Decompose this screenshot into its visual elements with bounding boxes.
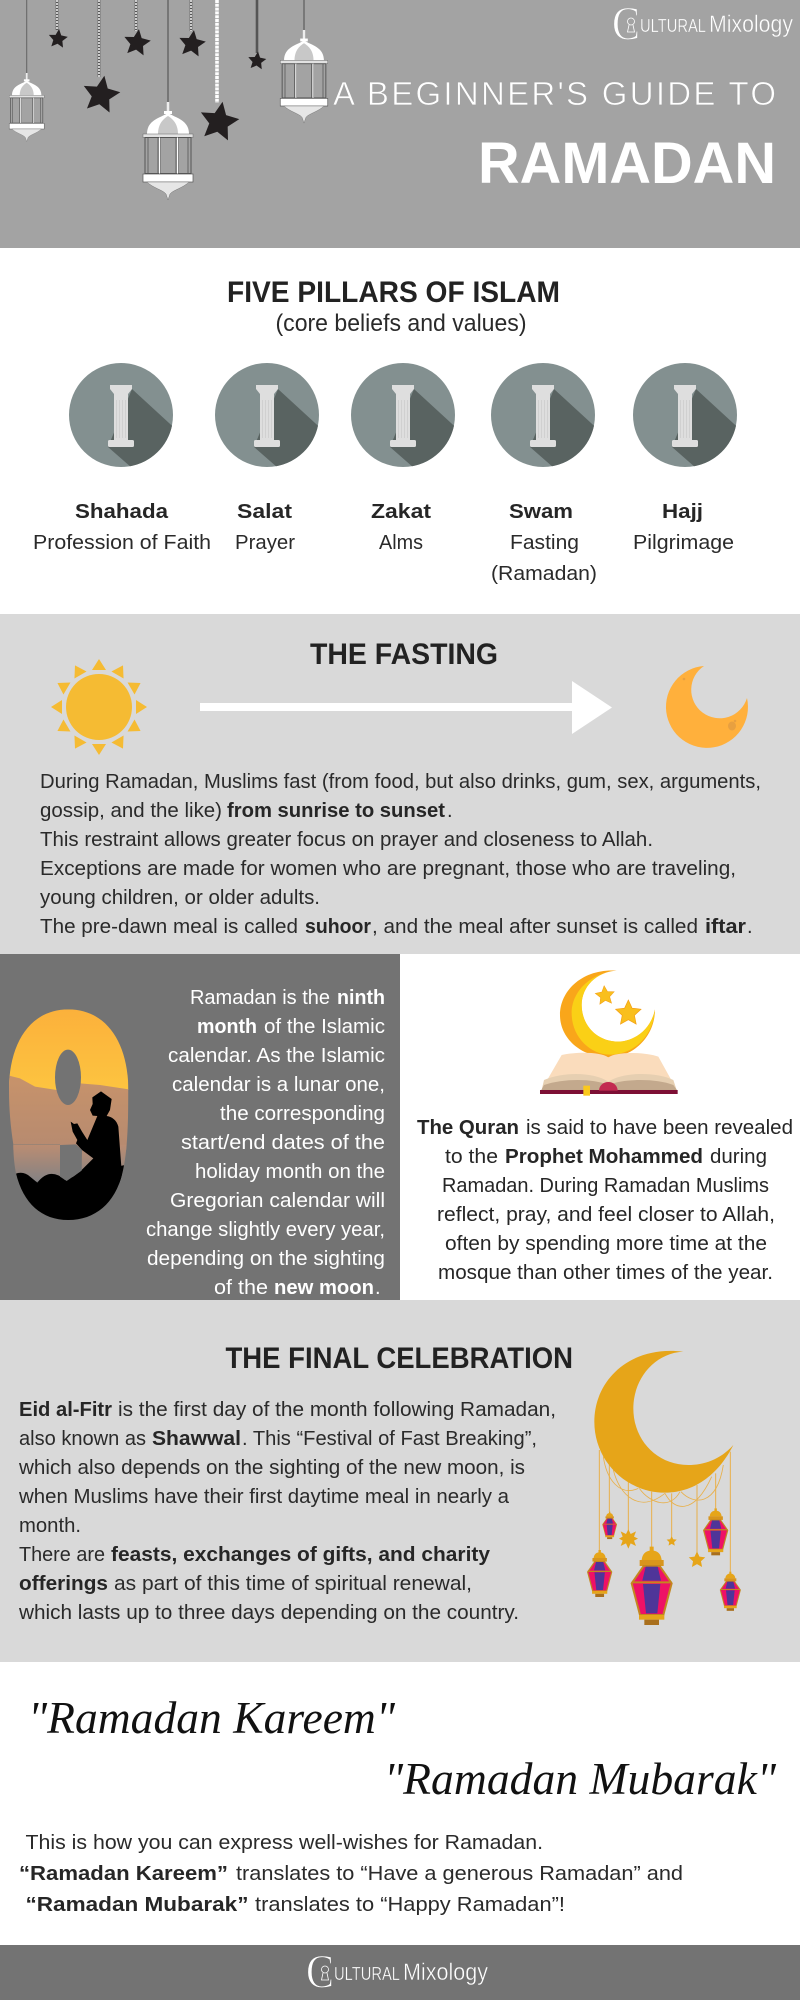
text: Eid al-Fitr description: when Muslims have their first daytime meal in nearly a <box>18 1485 510 1508</box>
text: fasting description: . <box>747 916 753 938</box>
text: ninth month description: Ramadan is the <box>190 987 330 1009</box>
text: ninth month description <box>146 987 385 1299</box>
text: ninth month description: holiday month on the <box>195 1161 385 1183</box>
text: Quran description: to the <box>445 1146 498 1168</box>
heading: the fasting: THE FASTING <box>310 638 498 671</box>
text: ninth month description: the corresponding <box>220 1103 385 1125</box>
label: Swam: (Ramadan) <box>491 562 597 585</box>
logo: Cultural Mixology footer <box>306 1946 488 1998</box>
label: Shahada: Profession of Faith <box>33 531 211 554</box>
panel: the final celebration <box>0 1300 800 1662</box>
text: fasting description: During Ramadan, Muslims fast (from food, but also drinks, gum, sex, arguments, <box>40 770 761 793</box>
label: Swam <box>491 501 597 585</box>
logo: Cultural Mixology <box>612 0 793 50</box>
text: Quran description: often by spending more time at the <box>445 1233 767 1255</box>
hanging lanterns and stars <box>9 0 328 200</box>
panel: header <box>0 0 800 248</box>
text: fasting description: gossip, and the like) <box>40 799 222 822</box>
title line: A Beginner's Guide to: A BEGINNER'S GUIDE TO <box>333 75 776 112</box>
label: Hajj <box>633 501 734 554</box>
text: Eid al-Fitr description: also known as <box>19 1427 146 1450</box>
heading: five pillars: FIVE PILLARS OF ISLAM <box>227 276 560 309</box>
text: Eid al-Fitr description: which lasts up to three days depending on the country. <box>18 1601 519 1624</box>
panel: ninth month <box>0 954 400 1300</box>
greeting: Ramadan Kareem: "Ramadan Kareem" <box>28 1693 396 1743</box>
text: Eid al-Fitr description: Eid al-Fitr <box>19 1399 112 1421</box>
text: ninth month description: Gregorian calendar will <box>170 1190 385 1212</box>
logo: Cultural Mixology footer: ULTURAL <box>334 1964 400 1984</box>
text: Quran description: mosque than other times of the year. <box>438 1262 773 1284</box>
label: Zakat: Zakat <box>371 501 431 523</box>
label: Hajj: Pilgrimage <box>633 531 734 554</box>
label: Zakat <box>371 501 431 554</box>
icon: pillar 5 <box>633 363 737 467</box>
greeting: Ramadan Mubarak: "Ramadan Mubarak" <box>384 1754 777 1804</box>
text: fasting description: from sunrise to sunset <box>227 800 445 822</box>
icon: pillar 1 <box>69 363 173 467</box>
panel: greetings <box>0 1662 800 1945</box>
text: ninth month description: start/end dates of the <box>181 1132 385 1154</box>
illustration: crescent with hanging lanterns <box>588 1351 740 1625</box>
text: fasting description: suhoor <box>305 916 371 938</box>
text: fasting description: iftar <box>705 916 746 938</box>
label: Salat: Salat <box>237 501 292 523</box>
label: Swam: Swam <box>509 501 573 523</box>
text: ninth month description: calendar is a lunar one, <box>172 1074 385 1096</box>
text: fasting description: . <box>447 800 453 822</box>
text: Eid al-Fitr description <box>18 1398 556 1624</box>
logo: Cultural Mixology footer: Mixology <box>403 1959 488 1986</box>
text: ninth month description: ninth <box>337 987 385 1009</box>
logo: Cultural Mixology footer: C <box>306 1946 334 1998</box>
text: greeting translations: translates to “Have a generous Ramadan” and <box>236 1862 683 1885</box>
text: fasting description: , and the meal after sunset is called <box>372 915 698 938</box>
text: Eid al-Fitr description: month. <box>19 1514 81 1537</box>
label: Salat: Prayer <box>235 531 295 554</box>
subheading: (core beliefs and values) <box>276 310 526 337</box>
label: Zakat: Alms <box>379 531 423 554</box>
icon: pillar 2 <box>215 363 319 467</box>
text: greeting translations <box>19 1831 683 1916</box>
text: fasting description: Exceptions are made for women who are pregnant, those who are traveling, <box>40 857 736 880</box>
text: ninth month description: month <box>197 1016 257 1038</box>
logo: Cultural Mixology: ULTURAL <box>640 16 706 36</box>
text: Quran description: is said to have been revealed <box>526 1117 793 1139</box>
icon: moon <box>666 666 748 748</box>
text: fasting description: The pre-dawn meal is called <box>40 915 298 938</box>
text: greeting translations: This is how you can express well-wishes for Ramadan. <box>26 1831 543 1854</box>
text: Eid al-Fitr description: which also depends on the sighting of the new moon, is <box>18 1456 525 1479</box>
text: ninth month description: of the Islamic <box>264 1016 385 1038</box>
label: Swam: Fasting <box>510 531 579 554</box>
icon: sun <box>51 659 147 755</box>
text: Quran description: Prophet Mohammed <box>505 1146 703 1168</box>
illustration: number nine with praying figure <box>9 1009 128 1220</box>
panel: footer <box>0 1945 800 2000</box>
panel: the fasting <box>0 614 800 954</box>
label: Shahada: Shahada <box>75 501 169 523</box>
text: ninth month description: change slightly every year, <box>146 1219 385 1241</box>
text: Eid al-Fitr description: There are <box>19 1543 105 1566</box>
text: ninth month description: of the <box>214 1277 268 1299</box>
panel: five pillars of Islam <box>0 248 800 614</box>
text: Quran description: reflect, pray, and feel closer to Allah, <box>437 1204 775 1226</box>
text: Eid al-Fitr description: offerings <box>19 1573 108 1595</box>
text: greeting translations: “Ramadan Kareem” <box>19 1863 228 1885</box>
icon: pillar 4 <box>491 363 595 467</box>
text: fasting description: This restraint allows greater focus on prayer and closeness to Allah. <box>40 828 653 851</box>
text: ninth month description: new moon <box>274 1277 374 1299</box>
panel: the Quran <box>400 954 800 1300</box>
icon: pillar 3 <box>351 363 455 467</box>
text: Eid al-Fitr description: is the first day of the month following Ramadan, <box>118 1398 556 1421</box>
text: fasting description: young children, or older adults. <box>40 886 320 909</box>
icon: crescent over open book <box>540 970 678 1096</box>
title: Ramadan: RAMADAN <box>478 131 776 196</box>
text: fasting description <box>40 770 761 938</box>
label: Shahada <box>33 501 211 554</box>
text: Eid al-Fitr description: Shawwal <box>152 1428 241 1450</box>
heading: final celebration: THE FINAL CELEBRATION <box>226 1342 573 1375</box>
text: Eid al-Fitr description: . This “Festival of Fast Breaking”, <box>242 1427 537 1450</box>
text: greeting translations: translates to “Happy Ramadan”! <box>255 1893 565 1916</box>
label: Salat <box>235 501 295 554</box>
text: Quran description: The Quran <box>417 1117 519 1139</box>
label: Hajj: Hajj <box>662 501 703 523</box>
text: Quran description: Ramadan. During Ramadan Muslims <box>442 1175 769 1197</box>
text: Quran description: during <box>710 1146 767 1168</box>
text: ninth month description: depending on the sighting <box>147 1248 385 1270</box>
text: Eid al-Fitr description: as part of this time of spiritual renewal, <box>114 1572 472 1595</box>
text: ninth month description: calendar. As the Islamic <box>168 1045 385 1067</box>
text: ninth month description: . <box>375 1277 381 1299</box>
text: Eid al-Fitr description: feasts, exchanges of gifts, and charity <box>111 1544 491 1566</box>
arrow: sunrise to sunset <box>200 681 612 734</box>
text: Quran description <box>417 1117 793 1284</box>
text: greeting translations: “Ramadan Mubarak” <box>26 1894 248 1916</box>
